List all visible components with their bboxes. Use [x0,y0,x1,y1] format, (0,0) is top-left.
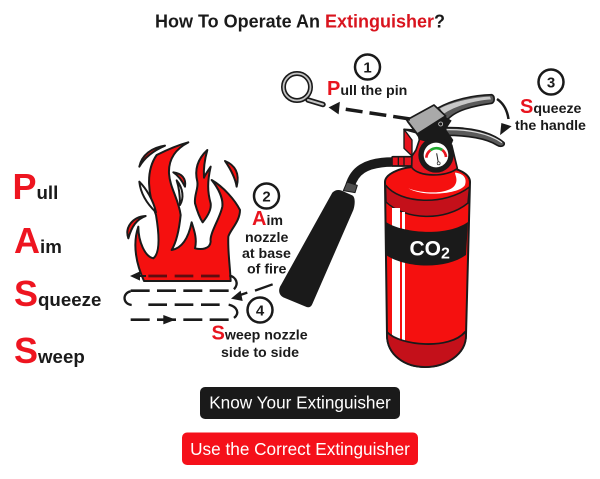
fire: top flare [139,146,165,167]
icon: CO2 fire extinguisher [279,95,504,367]
valve: lower handle [445,128,504,146]
step 3 text: Squeeze [520,96,581,118]
step 2 text: of fire [247,262,287,278]
step 4 number: 4 [256,302,265,320]
extinguisher: top band [386,185,470,216]
valve: upper handle [437,95,494,121]
step 1 text: Pull the pin [327,78,407,100]
step 2 label [242,184,291,278]
extinguisher: black label band [386,222,468,266]
PASS: Aim: Aim [14,220,62,261]
extinguisher: white stripes [392,208,400,342]
step 2 number: 2 [262,188,271,206]
step 4 text: side to side [221,345,299,361]
fire: left sliver [139,182,156,212]
step 3 text: the handle [515,118,586,134]
extinguisher: nozzle horn [279,190,355,307]
sweep arrows: dashed passes across base of fire [125,271,273,324]
fire: centre sliver [177,180,182,205]
valve: black head [407,113,453,148]
button: Know Your Extinguisher: Know Your Extinguisher [209,392,391,412]
step 3 label [515,70,586,134]
extinguisher: nozzle collar [343,182,357,193]
icon: pull pin ring [284,74,323,104]
fire: left flare [127,216,146,238]
extinguisher: bottom band [387,332,466,367]
step 2 text: nozzle [245,230,288,246]
title: How To Operate An Extinguisher? [155,12,445,32]
valve: pressure gauge [418,137,454,173]
step 2 text: Aim [252,208,283,230]
PASS: Sweep: Sweep [14,330,85,371]
extinguisher: valve assembly [404,95,504,175]
PASS: Squeeze: Squeeze [14,273,101,314]
extinguisher: CO2 text: CO [410,238,441,260]
extinguisher: cylinder body [385,167,470,367]
PASS list [12,166,101,371]
PASS: Pull: Pull [12,166,58,207]
button: Know Your Extinguisher [200,387,400,419]
button: Use the Correct Extinguisher [182,432,418,465]
step 4 label [212,298,308,361]
step 1 number: 1 [363,60,372,76]
valve: grey block [407,105,446,134]
icon: fire flames [127,142,240,281]
valve: red neck [404,129,457,175]
valve: pin hole [439,122,443,126]
fire: small flare [173,172,185,187]
fire: inner tongue [195,150,211,222]
arrow: squeeze handle [497,99,510,134]
arrow: pin pull direction [330,103,410,119]
button: Use the Correct Extinguisher: Use the Correct Extinguisher [190,439,410,459]
extinguisher: shine [408,173,466,194]
extinguisher: hose [350,162,393,186]
extinguisher: CO2 text: 2 [441,246,450,262]
step 3 number: 3 [547,74,555,92]
extinguisher: hose connector [392,157,413,166]
step 4 text: Sweep nozzle [212,322,308,344]
fire: right flare [225,161,238,187]
fire: main silhouette [135,142,240,281]
step 2 text: at base [242,246,291,262]
step 1 label [327,54,407,100]
